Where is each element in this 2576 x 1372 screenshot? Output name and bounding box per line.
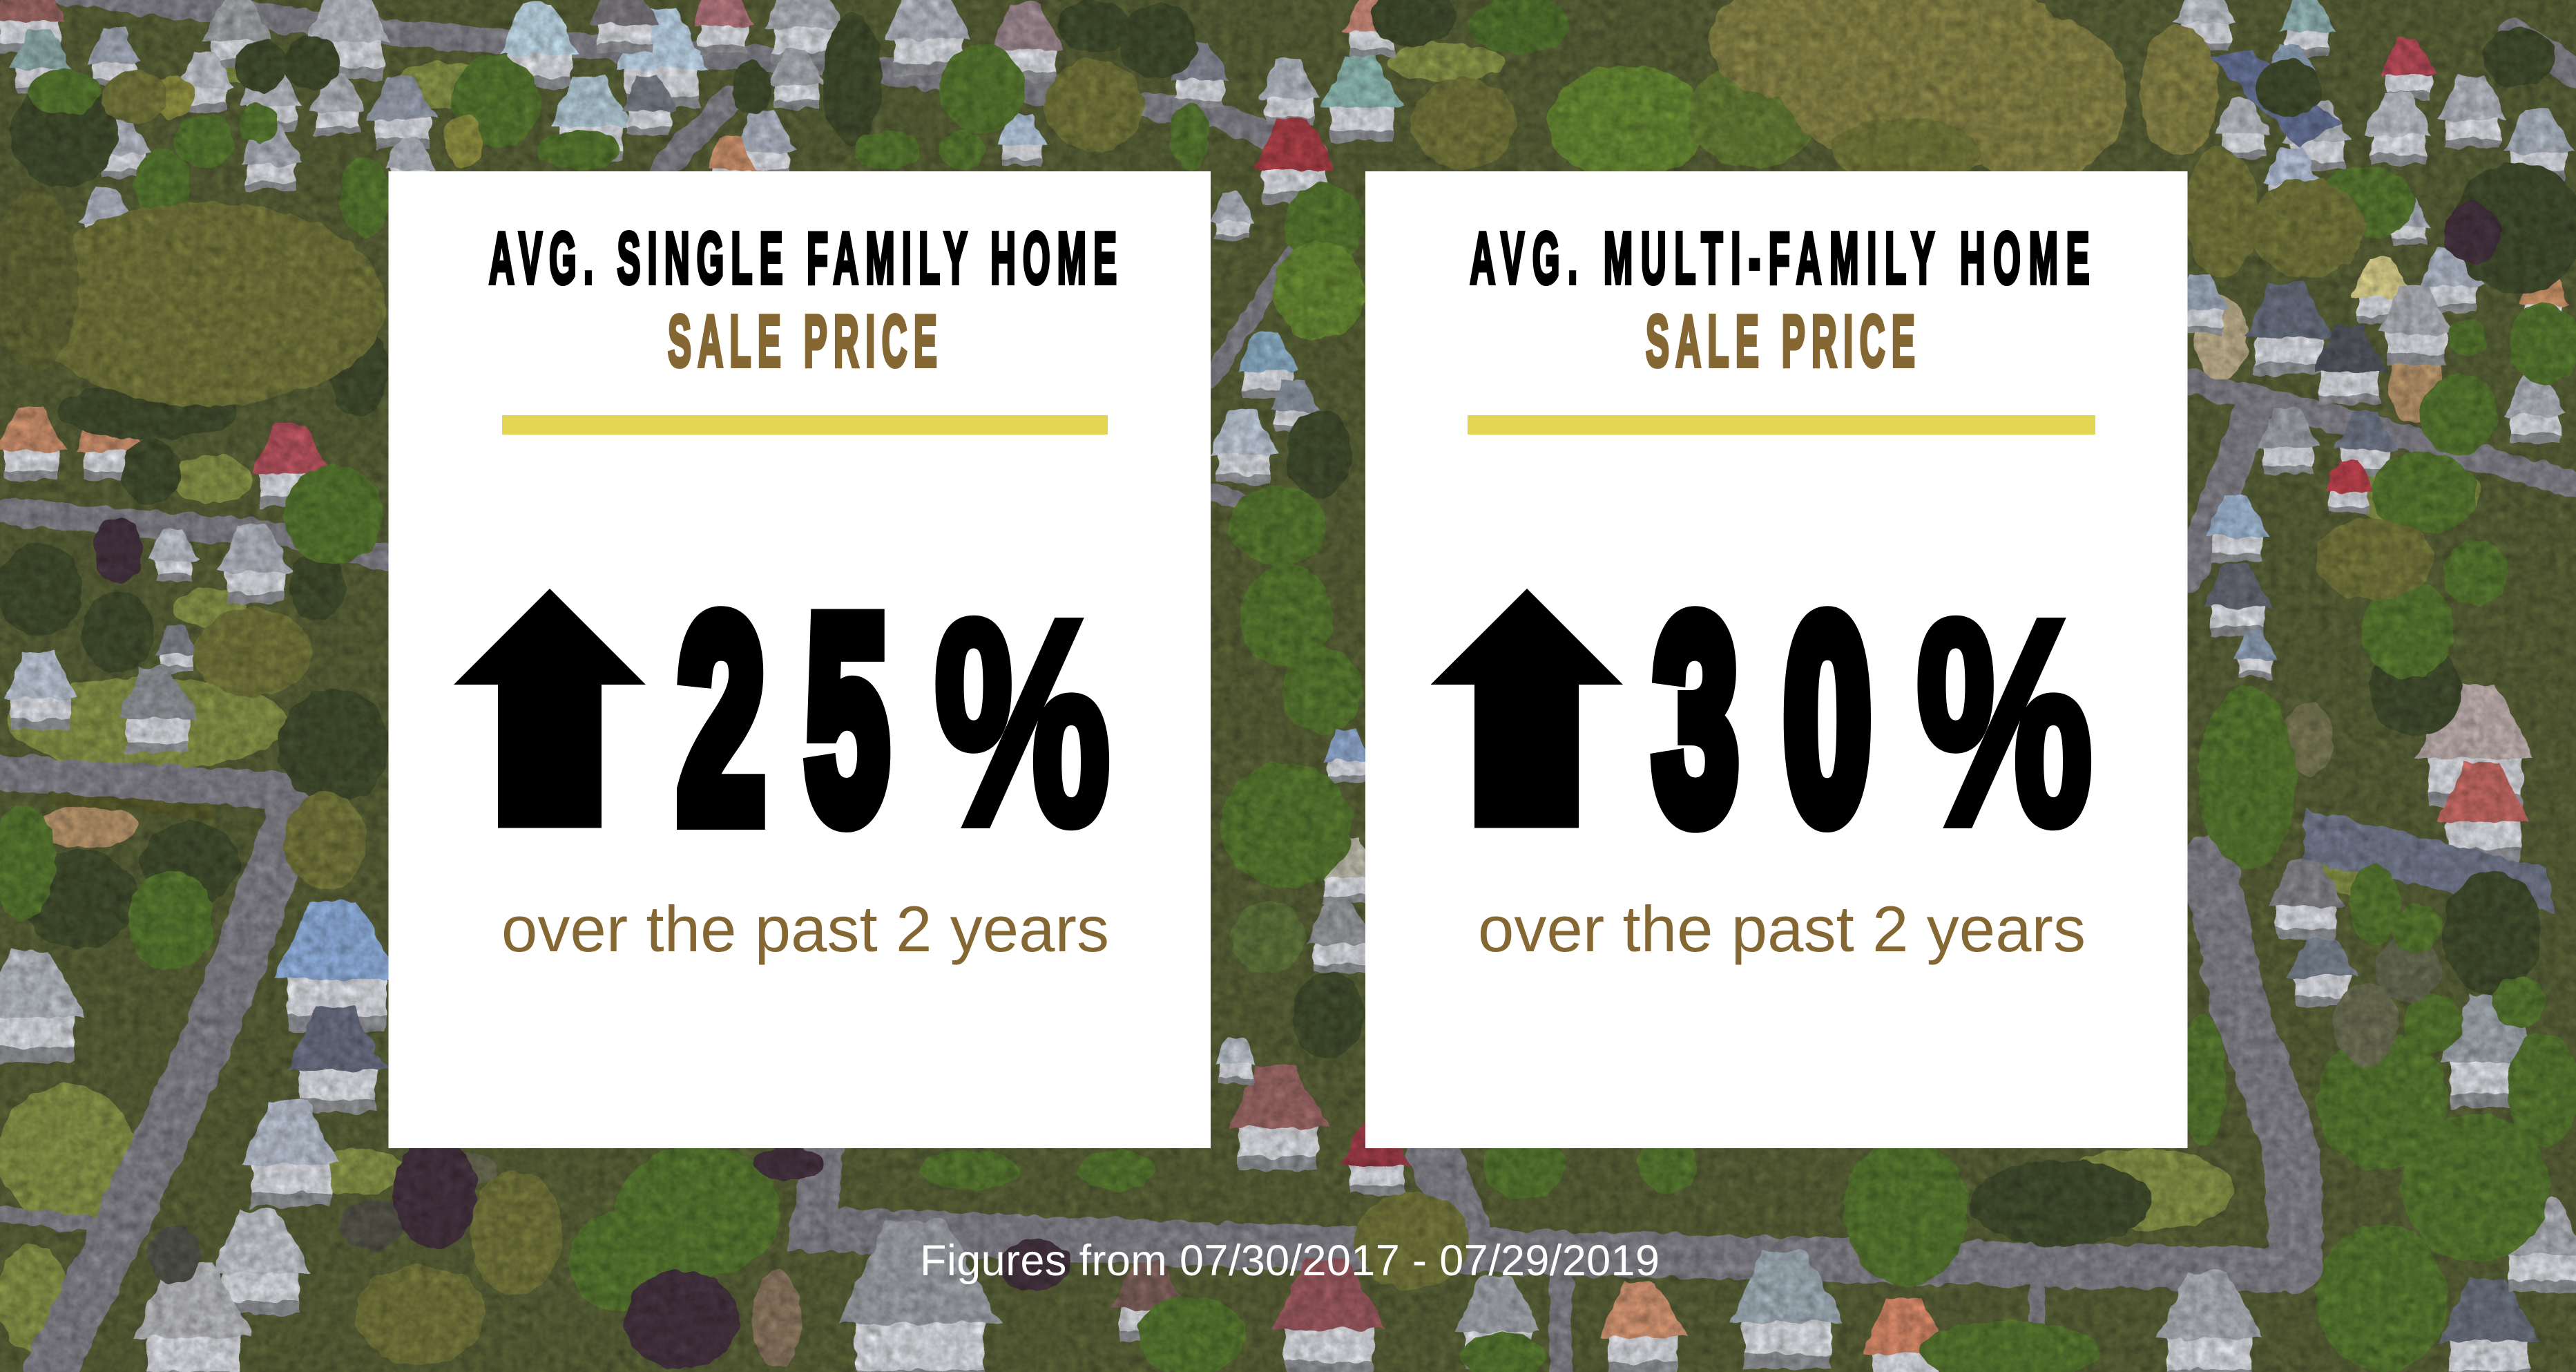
divider bar [502, 415, 1108, 435]
statistic: 30 percent: 0 [1784, 558, 1871, 879]
statistic: 25 percent: 2 [677, 558, 765, 879]
statistic: 30 percent: % [1916, 561, 2093, 885]
icon: up arrow [1431, 589, 1623, 828]
heading: avg multi-family home: AVG. MULTI-FAMILY HOME [1470, 217, 2090, 299]
statistic: 30 percent [1653, 558, 2093, 885]
footnote: date range: Figures from 07/30/2017 - 07/29/2019 [920, 1237, 1660, 1285]
statistic: 25 percent [677, 558, 1111, 885]
panel: multi-family home [1365, 171, 2188, 1148]
statistic: 25 percent: % [934, 561, 1111, 885]
caption: over the past 2 years: over the past 2 years [1478, 893, 2086, 965]
statistic: 30 percent: 3 [1653, 559, 1738, 879]
caption: over the past 2 years: over the past 2 years [501, 893, 1109, 965]
subheading: sale price: SALE PRICE [668, 300, 937, 382]
icon: up arrow [454, 589, 646, 828]
statistic: 25 percent: 5 [805, 560, 889, 879]
divider bar [1468, 415, 2095, 435]
subheading: sale price: SALE PRICE [1646, 300, 1915, 382]
heading: avg single family home: AVG. SINGLE FAMILY HOME [489, 217, 1117, 299]
panel: single family home [388, 171, 1211, 1148]
